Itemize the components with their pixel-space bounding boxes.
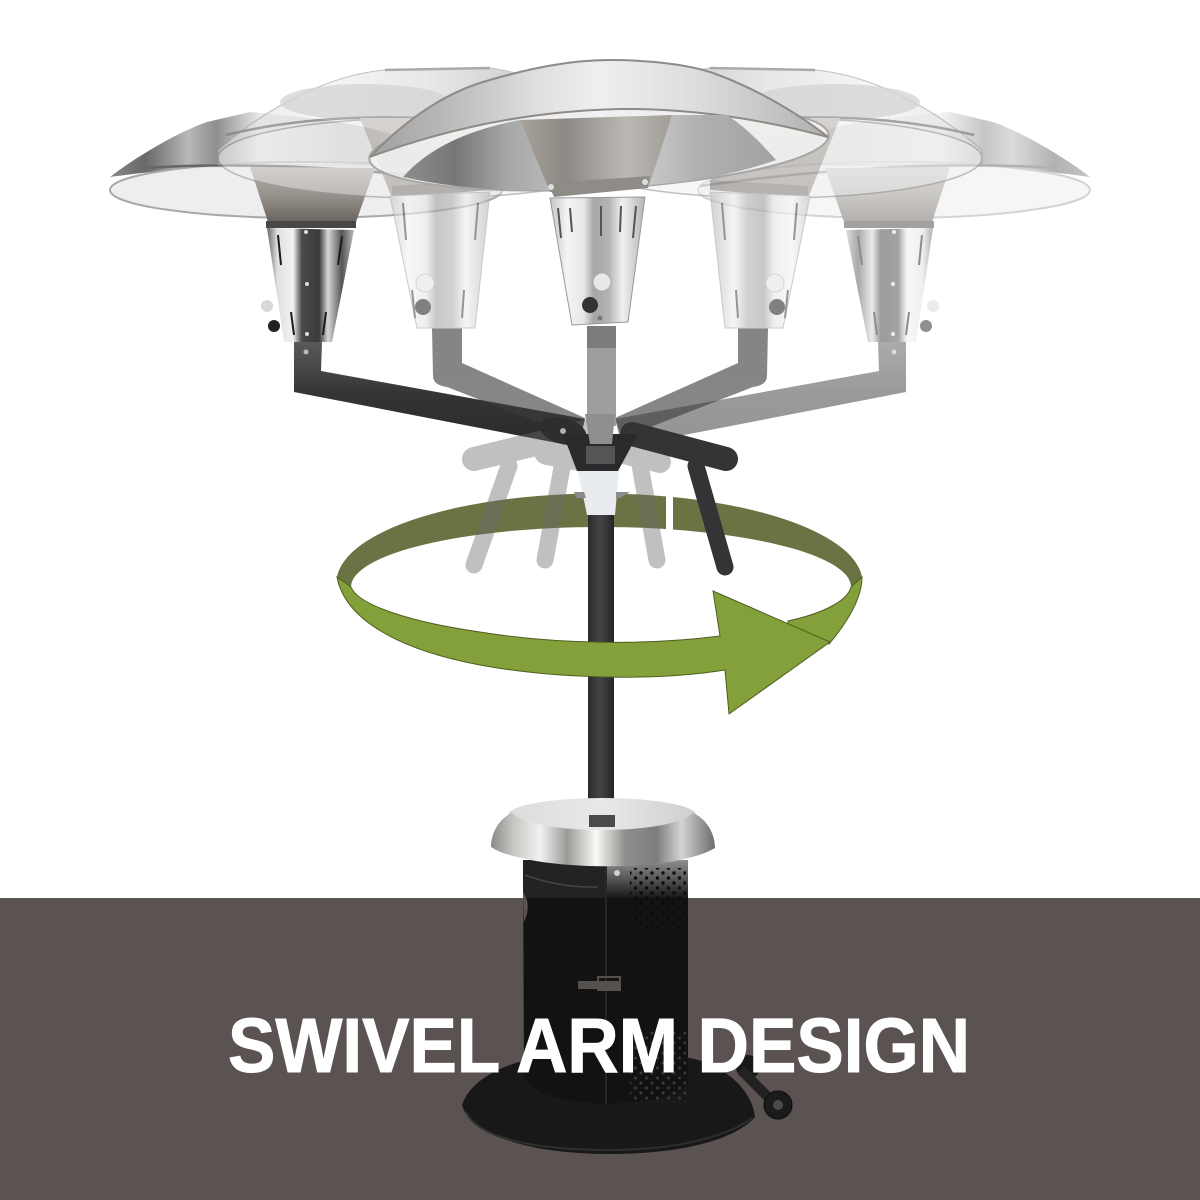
rotation arrow: front arc: [337, 577, 862, 714]
ghost handles: [474, 432, 660, 565]
cylinder tank housing: [523, 860, 688, 1104]
base plate with wheels: [462, 1055, 792, 1154]
centre pole: [588, 515, 614, 815]
far left heater head, solid: [110, 112, 585, 447]
solid handle: [632, 434, 726, 567]
stainless steel cap: [491, 798, 715, 866]
centre heater head, ghost: [367, 60, 831, 426]
far right heater head, ghost: [615, 112, 1090, 447]
rotation ring: back arc: [337, 486, 862, 587]
mid left heater head, ghost: [218, 68, 632, 438]
mid right heater head, ghost: [568, 68, 982, 438]
pivot hub: [536, 412, 638, 515]
title: SWIVEL ARM DESIGN: [228, 1003, 970, 1089]
background band: [0, 898, 1200, 1200]
